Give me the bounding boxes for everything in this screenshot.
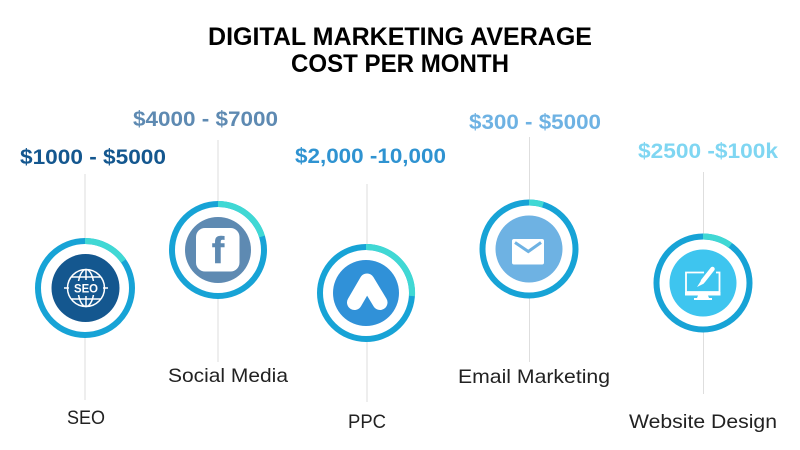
Website Design label: Website Design xyxy=(629,411,777,433)
Website Design progress ring xyxy=(656,236,750,330)
SEO label: SEO xyxy=(67,407,105,429)
icon: monitor and brush xyxy=(670,250,736,316)
PPC price: $2,000 -10,000 xyxy=(295,145,446,168)
title: DIGITAL MARKETING AVERAGE xyxy=(208,23,592,51)
icon: Facebook: f xyxy=(212,230,225,271)
panel: SEO xyxy=(20,146,166,429)
icon: Google Ads xyxy=(333,260,399,326)
Email Marketing price: $300 - $5000 xyxy=(469,111,601,134)
Social Media progress ring xyxy=(172,204,264,296)
Email Marketing progress ring xyxy=(482,202,576,296)
SEO progress ring xyxy=(38,241,132,335)
title: COST PER MONTH xyxy=(291,50,509,78)
icon: SEO globe xyxy=(52,254,120,322)
PPC label: PPC xyxy=(348,411,386,433)
title xyxy=(208,23,592,78)
panel: Email Marketing xyxy=(458,111,610,388)
panel: Website Design xyxy=(629,140,778,433)
Website Design price: $2500 -$100k xyxy=(638,140,778,163)
SEO price: $1000 - $5000 xyxy=(20,146,166,169)
Email Marketing label: Email Marketing xyxy=(458,366,610,388)
panel: Social Media xyxy=(133,108,288,387)
Social Media price: $4000 - $7000 xyxy=(133,108,278,131)
icon: Facebook xyxy=(185,217,251,283)
panel: PPC xyxy=(295,145,446,433)
icon: SEO globe: SEO xyxy=(74,282,98,296)
icon: envelope xyxy=(496,216,562,282)
Social Media label: Social Media xyxy=(168,365,288,387)
PPC progress ring xyxy=(320,247,412,339)
